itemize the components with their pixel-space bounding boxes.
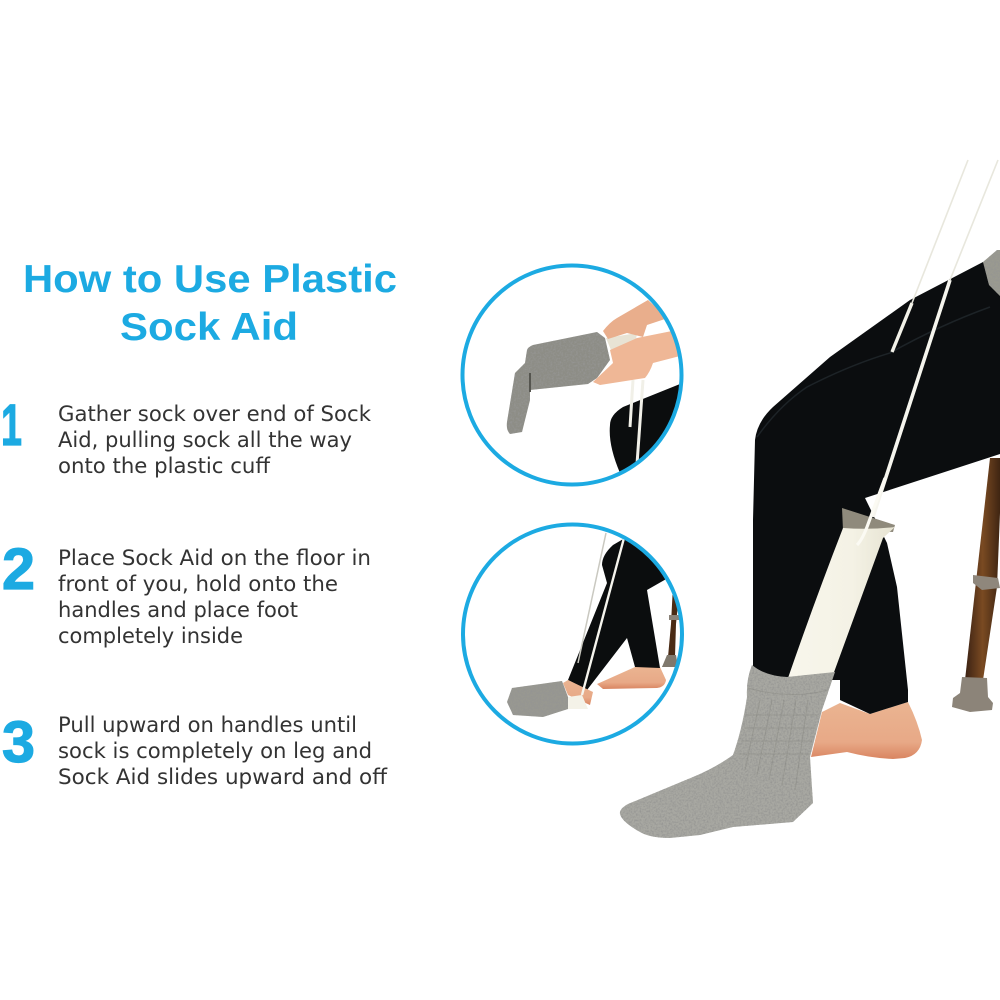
chair collar (669, 615, 680, 620)
step 1 text: onto the plastic cuff (58, 454, 271, 478)
front foot (563, 680, 593, 705)
aid body (788, 527, 895, 678)
circle photo 1: gathering sock over aid (462, 266, 695, 490)
seated leg (610, 384, 679, 472)
chair leg (662, 594, 678, 667)
step 1 text: Gather sock over end of Sock (58, 402, 372, 426)
plastic cuff (606, 333, 637, 350)
chair leg (952, 458, 1000, 712)
step 3 text: sock is completely on leg and (58, 739, 372, 763)
step 3 (2, 710, 388, 789)
cords (578, 533, 606, 663)
back foot (811, 702, 922, 759)
step 3 text: Pull upward on handles until (58, 713, 357, 737)
step 2 (2, 537, 371, 648)
circle ring (463, 524, 682, 744)
step 1 text (58, 402, 372, 478)
sock aid on floor (568, 695, 588, 709)
step 2 text: front of you, hold onto the (58, 572, 338, 596)
cords (857, 160, 998, 545)
shorts sock at top (983, 250, 1000, 296)
gathered sock (507, 332, 610, 434)
step 3 text (58, 713, 388, 789)
chair foot (662, 655, 678, 667)
circle photo 2: foot into aid (463, 524, 682, 744)
sock on floor (507, 681, 568, 717)
aid inner (842, 508, 895, 532)
back foot (597, 667, 666, 689)
title (23, 258, 397, 349)
step 1 (1, 393, 372, 478)
step 2 number: 2 (2, 537, 35, 602)
legs (568, 530, 668, 690)
legs (753, 262, 1000, 714)
title: How to Use Plastic (23, 258, 397, 301)
step 2 text: handles and place foot (58, 598, 298, 622)
cords (630, 380, 643, 464)
chair foot (952, 677, 993, 712)
circle ring (462, 266, 682, 484)
step 1 number: 1 (1, 393, 22, 458)
step 2 text (58, 546, 371, 648)
step 2 text: Place Sock Aid on the floor in (58, 546, 371, 570)
step 3 number: 3 (2, 710, 35, 775)
thigh highlight (757, 307, 990, 437)
step 2 text: completely inside (58, 624, 243, 648)
sock fold (529, 373, 531, 392)
main sock (620, 665, 835, 838)
lower hand (593, 331, 684, 385)
main photo: seated person with sock aid (620, 160, 1000, 838)
sock aid (788, 508, 895, 678)
step 1 text: Aid, pulling sock all the way (58, 428, 352, 452)
upper hand (603, 300, 668, 339)
title: Sock Aid (120, 306, 298, 349)
sock ribbing (738, 688, 828, 790)
chair collar (973, 575, 1000, 590)
step 3 text: Sock Aid slides upward and off (58, 765, 388, 789)
